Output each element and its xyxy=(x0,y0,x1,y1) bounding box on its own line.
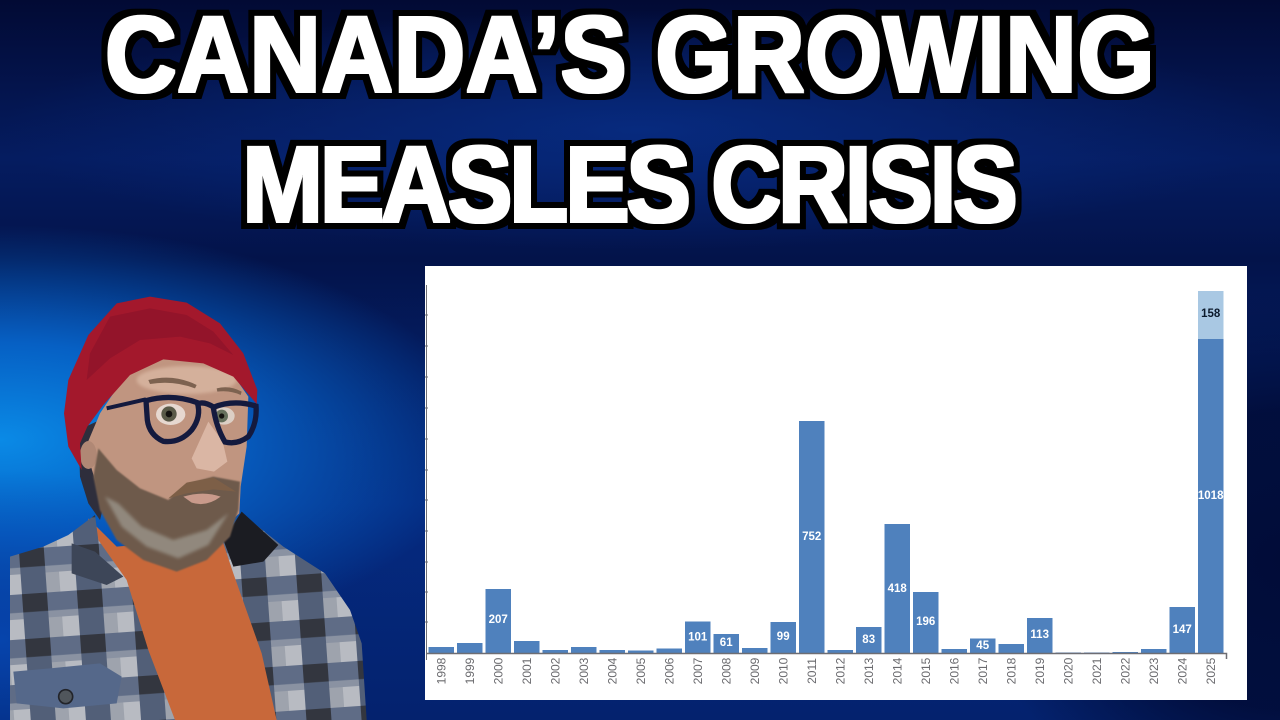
year labels: 2000 xyxy=(492,657,506,684)
pocket button xyxy=(59,690,73,704)
title xyxy=(105,0,1155,245)
jacket collar left xyxy=(72,543,123,585)
bar value labels: 45 xyxy=(976,640,990,652)
bar value labels: 207 xyxy=(489,614,508,626)
panel: chart xyxy=(425,266,1247,700)
bar value labels: 101 xyxy=(688,632,708,644)
year labels: 2019 xyxy=(1033,657,1047,684)
plaid jacket right xyxy=(223,513,367,720)
bar value labels: 418 xyxy=(888,583,907,595)
bar value labels xyxy=(489,308,1224,652)
bar value labels: 99 xyxy=(777,631,790,643)
year labels: 2004 xyxy=(606,657,620,684)
bar value labels: 61 xyxy=(720,637,733,649)
year labels: 2006 xyxy=(662,657,676,684)
year labels: 1998 xyxy=(434,657,448,684)
lips xyxy=(183,494,221,504)
year labels: 2001 xyxy=(520,657,534,684)
year labels: 2010 xyxy=(776,657,790,684)
year labels: 2002 xyxy=(548,657,562,684)
person illustration xyxy=(10,297,367,720)
eye left xyxy=(156,404,185,425)
bar value labels: 147 xyxy=(1173,624,1192,636)
year labels: 2005 xyxy=(634,657,648,684)
bar value labels: 158 xyxy=(1201,308,1221,320)
year labels: 2018 xyxy=(1004,657,1018,684)
year labels: 2023 xyxy=(1147,657,1161,684)
moustache xyxy=(168,477,236,498)
year labels: 2020 xyxy=(1062,657,1076,684)
bar value labels: 1018 xyxy=(1198,490,1224,502)
title line 2: MEASLES CRISIS xyxy=(242,124,1018,245)
year labels: 2022 xyxy=(1118,657,1132,684)
year labels: 2003 xyxy=(577,657,591,684)
year labels: 2011 xyxy=(805,658,819,684)
bar: 2025 provisional segment xyxy=(1198,291,1224,339)
year labels: 2015 xyxy=(919,657,933,684)
year labels: 2013 xyxy=(862,657,876,684)
year labels: 2007 xyxy=(691,657,705,684)
y axis xyxy=(425,285,428,660)
chest pocket xyxy=(13,663,122,708)
jacket collar right xyxy=(223,512,278,567)
bar value labels: 83 xyxy=(862,634,875,646)
year labels: 2017 xyxy=(976,657,990,684)
year labels: 2008 xyxy=(720,657,734,684)
year labels: 2025 xyxy=(1204,657,1218,684)
year labels: 1999 xyxy=(463,657,477,684)
ear xyxy=(80,441,97,469)
forehead highlight xyxy=(137,366,237,394)
year labels xyxy=(434,657,1218,684)
x axis xyxy=(427,654,1226,659)
year labels: 2021 xyxy=(1090,657,1104,684)
year labels: 2014 xyxy=(890,657,904,684)
year labels: 2024 xyxy=(1176,657,1190,684)
bar value labels: 752 xyxy=(802,531,821,543)
year labels: 2012 xyxy=(834,657,848,684)
nose xyxy=(192,422,227,472)
beard grey highlights xyxy=(105,497,228,558)
year labels: 2016 xyxy=(948,657,962,684)
hair behind ear xyxy=(78,420,107,520)
head skin xyxy=(87,357,248,550)
bar value labels: 196 xyxy=(916,616,935,628)
bar value labels: 113 xyxy=(1030,629,1049,641)
eye right xyxy=(213,407,235,425)
bars xyxy=(428,339,1224,653)
year labels: 2009 xyxy=(748,657,762,684)
glasses xyxy=(107,397,256,443)
eyebrows xyxy=(148,378,242,395)
red beanie xyxy=(64,297,257,470)
beard xyxy=(93,448,240,572)
plaid jacket left xyxy=(10,515,175,720)
orange t-shirt xyxy=(88,518,287,720)
